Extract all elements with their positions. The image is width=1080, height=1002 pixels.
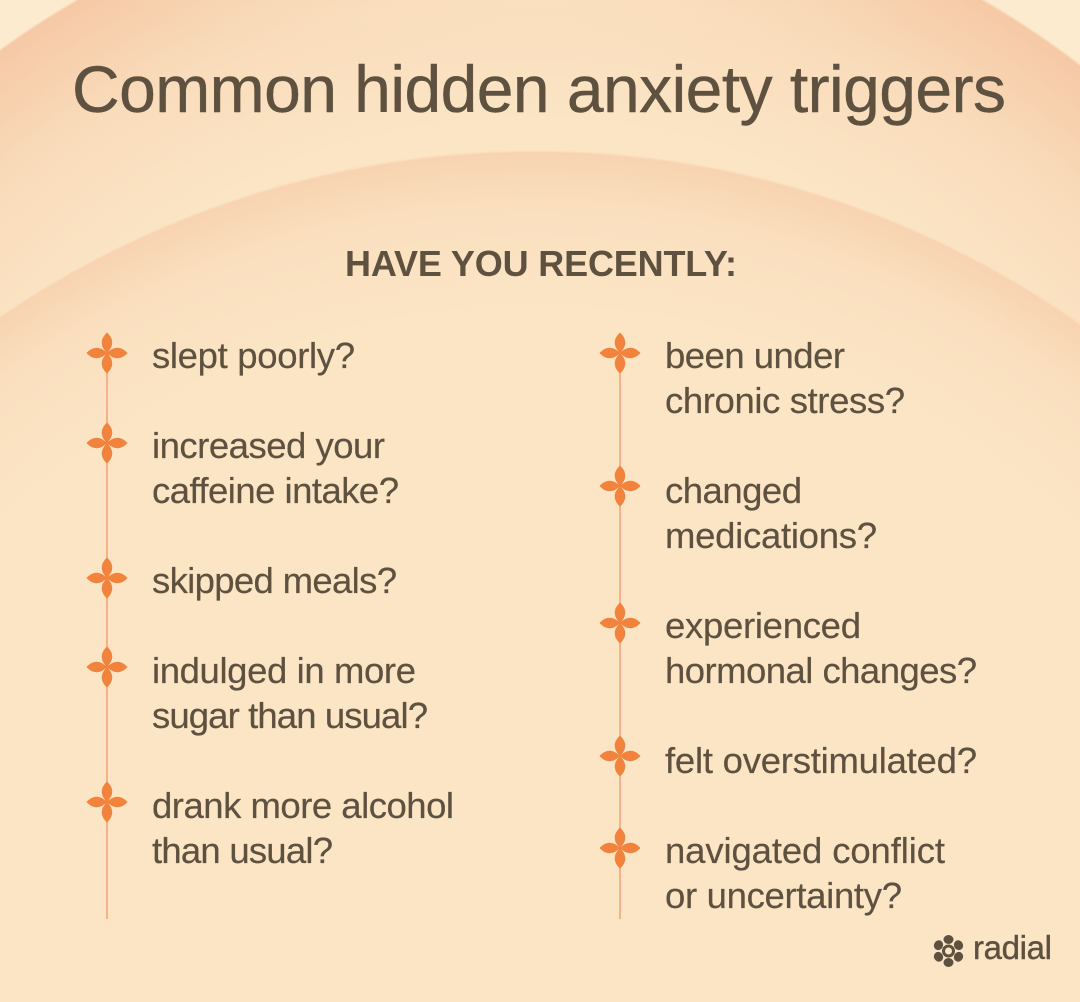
logo: radial: [932, 929, 1052, 967]
item: sugar: sugar than usual?: [152, 695, 428, 736]
item: caffeine: caffeine intake?: [152, 470, 399, 511]
title: Common hidden anxiety triggers: [72, 52, 1006, 126]
logo wordmark: radial: [973, 929, 1052, 966]
item: alcohol: [86, 782, 454, 871]
item: alcohol: than usual?: [152, 830, 333, 871]
item: skipped meals: skipped meals?: [152, 560, 397, 601]
item: medications: medications?: [665, 515, 877, 556]
icon: radial flower: [932, 935, 965, 967]
left timeline line: [106, 353, 108, 919]
item: medications: [600, 466, 877, 556]
item: chronic stress: been under: [665, 335, 845, 376]
item: sugar: [86, 646, 428, 736]
item: medications: changed: [665, 470, 802, 511]
item: conflict: or uncertainty?: [665, 875, 902, 916]
item: hormonal changes: hormonal changes?: [665, 650, 977, 691]
item: chronic stress: [600, 332, 905, 421]
item: conflict: navigated conflict: [665, 830, 945, 871]
item: slept poorly: slept poorly?: [152, 335, 355, 376]
item: chronic stress: chronic stress?: [665, 380, 905, 421]
item: caffeine: [86, 422, 399, 511]
left column checklist: [86, 332, 454, 919]
item: hormonal changes: experienced: [665, 605, 861, 646]
item: caffeine: increased your: [152, 425, 385, 466]
subheading: HAVE YOU RECENTLY:: [345, 243, 737, 284]
item: hormonal changes: [600, 602, 977, 691]
item: sugar: indulged in more: [152, 650, 416, 691]
right timeline line: [619, 353, 621, 919]
item: conflict: [600, 828, 945, 916]
item: alcohol: drank more alcohol: [152, 785, 454, 826]
item: overstimulated: felt overstimulated?: [665, 740, 977, 781]
right column checklist: [600, 332, 977, 919]
